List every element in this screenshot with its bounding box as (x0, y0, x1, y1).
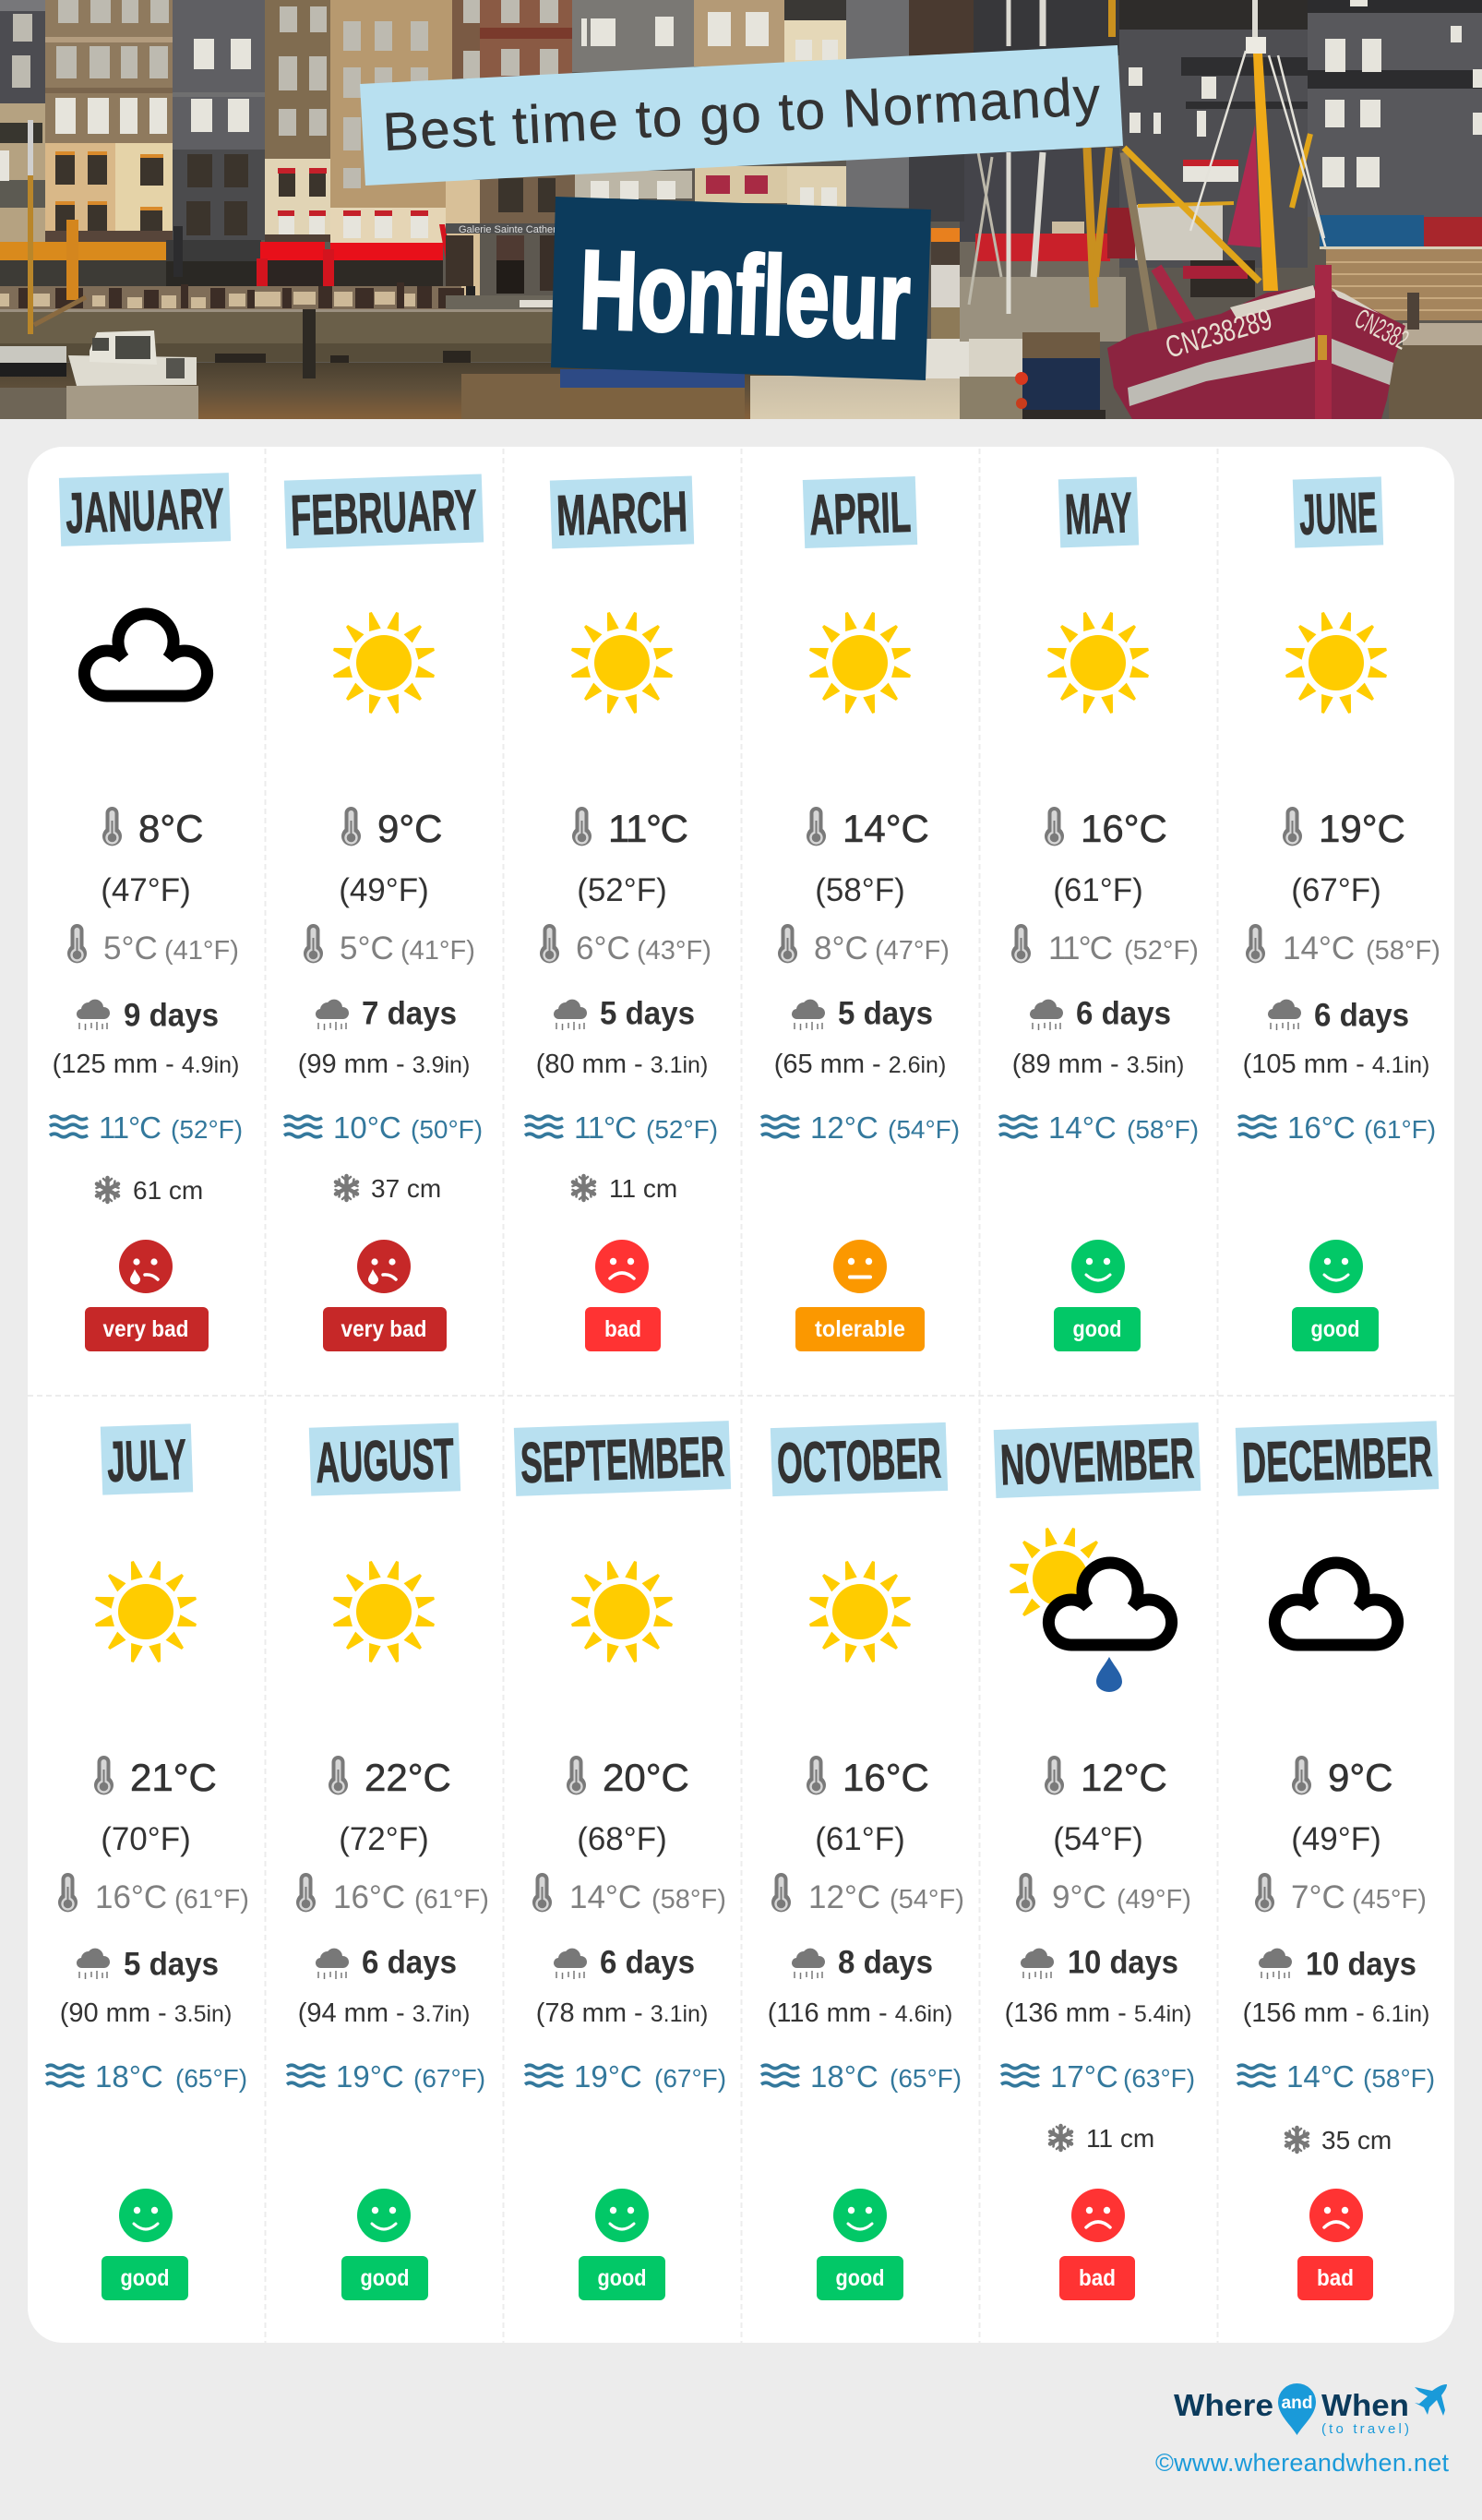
average temperature: 9°C (377, 807, 443, 850)
precipitation: (156 mm - 6.1in) (1243, 1998, 1429, 2028)
banner: subtitle: Best time to go to Normandy (381, 66, 1102, 162)
rainy days: 5 days (124, 1947, 219, 1983)
month label: JUNE (1298, 481, 1378, 547)
weather icon: sun (808, 611, 912, 714)
precipitation: (105 mm - 4.1in) (1243, 1050, 1429, 1079)
weather icon: sun (808, 1560, 912, 1663)
low temperature: (43°F) (637, 936, 711, 966)
rating: bad: bad (604, 1316, 641, 1342)
low temperature: 9°C (1052, 1879, 1106, 1915)
precipitation: (136 mm - 5.4in) (1005, 1998, 1191, 2028)
average temperature: 16°C (1081, 807, 1167, 850)
rating: very bad (85, 1240, 209, 1351)
logo: Where and When: Where (1174, 2388, 1273, 2422)
rainy days: 10 days (1306, 1947, 1416, 1983)
precipitation: (116 mm - 4.6in) (768, 1998, 952, 2028)
average temperature: 12°C (1081, 1756, 1167, 1799)
precipitation: (78 mm - 3.1in) (536, 1998, 708, 2028)
low temperature (778, 924, 950, 966)
snowfall (1050, 2124, 1154, 2153)
weather icon: sun (570, 611, 674, 714)
rating: tolerable (795, 1240, 925, 1351)
precipitation: (65 mm - 2.6in) (774, 1050, 946, 1079)
low temperature: (45°F) (1352, 1885, 1427, 1914)
weather icon: sun (570, 1560, 674, 1663)
sea temperature: (50°F) (411, 1115, 483, 1144)
average temperature: 9°C (1328, 1756, 1393, 1799)
month label: SEPTEMBER (520, 1425, 725, 1495)
rainy days: 6 days (1314, 998, 1409, 1034)
snowfall (1286, 2126, 1392, 2154)
month label (1058, 477, 1139, 547)
sea temperature (287, 2059, 485, 2094)
average temperature (572, 807, 688, 850)
low temperature (540, 924, 711, 966)
sea temperature: (63°F) (1123, 2064, 1195, 2093)
rainy days: 5 days (838, 995, 933, 1032)
low temperature: (61°F) (414, 1885, 489, 1914)
sea temperature: 18°C (810, 2059, 878, 2094)
hero photo: Honfleur harbour (0, 0, 1482, 419)
rating: good: good (360, 2265, 410, 2291)
weather icon: sun behind cloud with rain drop (1009, 1527, 1172, 1692)
rainy days (792, 1944, 933, 1981)
average temperature: 21°C (130, 1756, 217, 1799)
low temperature: (52°F) (1124, 936, 1199, 966)
sea temperature (761, 2059, 962, 2094)
low temperature (1011, 924, 1199, 966)
sea temperature (525, 1110, 718, 1145)
month label: FEBRUARY (290, 478, 478, 548)
rating: good: good (1072, 1316, 1122, 1342)
month label: OCTOBER (776, 1427, 942, 1495)
cell: March (525, 475, 718, 1351)
month label (994, 1422, 1201, 1498)
snowfall: 11 cm (1086, 2124, 1154, 2153)
sea temperature: 17°C (1050, 2059, 1118, 2094)
sea temperature: (67°F) (654, 2064, 726, 2093)
sea temperature: (58°F) (1127, 1115, 1199, 1144)
average temperature: 11°C (608, 807, 688, 850)
low temperature: 5°C (340, 930, 394, 966)
cell: November (994, 1422, 1201, 2300)
low temperature (1255, 1873, 1427, 1915)
precipitation: (94 mm - 3.7in) (298, 1998, 470, 2028)
rating: good: good (598, 2265, 646, 2291)
cell: May (999, 477, 1199, 1351)
sea temperature (284, 1110, 483, 1145)
sea temperature: 14°C (1048, 1110, 1117, 1145)
rating: good: good (836, 2265, 884, 2291)
rainy days: 7 days (362, 995, 457, 1032)
rainy days: 6 days (600, 1944, 695, 1981)
rating: very bad: very bad (341, 1316, 426, 1342)
rating: good (102, 2189, 188, 2300)
low temperature: (58°F) (1366, 936, 1440, 966)
month label: MAY (1064, 481, 1133, 547)
banner: city title: Honfleur (578, 226, 912, 363)
rating: very bad (323, 1240, 447, 1351)
low temperature: (41°F) (164, 936, 239, 966)
fahrenheit temperature: (61°F) (1053, 872, 1143, 908)
low temperature: 16°C (95, 1879, 167, 1915)
rainy days (1259, 1947, 1416, 1983)
low temperature: (54°F) (890, 1885, 964, 1914)
sea temperature (1238, 1110, 1436, 1145)
month label (284, 474, 484, 549)
sea temperature: (52°F) (171, 1115, 243, 1144)
month label: NOVEMBER (999, 1427, 1195, 1497)
month label: JANUARY (65, 477, 225, 546)
rating: good (1292, 1240, 1379, 1351)
low temperature: (61°F) (174, 1885, 249, 1914)
snowfall: 35 cm (1321, 2126, 1392, 2154)
fahrenheit temperature: (49°F) (1291, 1821, 1381, 1857)
low temperature: 11°C (1048, 930, 1113, 966)
sea temperature (1001, 2059, 1195, 2094)
cell: August (287, 1422, 489, 2300)
low temperature (771, 1873, 964, 1915)
rainy days: 8 days (838, 1944, 933, 1981)
rating: bad (1059, 2189, 1135, 2300)
sea temperature: 16°C (1287, 1110, 1356, 1145)
low temperature: 12°C (808, 1879, 880, 1915)
cell: October (761, 1422, 964, 2300)
fahrenheit temperature: (70°F) (101, 1821, 191, 1857)
rainy days (1021, 1944, 1178, 1981)
average temperature: 8°C (138, 807, 203, 850)
hero photo: Honfleur harbour: CN238289 (1162, 302, 1275, 365)
cell: September (514, 1421, 731, 2300)
weather icon: sun (332, 1560, 436, 1663)
low temperature (1016, 1873, 1191, 1915)
rainy days (316, 995, 457, 1032)
rainy days (1268, 998, 1409, 1034)
low temperature: 14°C (569, 1879, 641, 1915)
sea temperature (761, 1110, 960, 1145)
month label (59, 473, 231, 546)
weather icon: cloud (84, 614, 208, 696)
rainy days (554, 1944, 695, 1981)
low temperature: 7°C (1291, 1879, 1345, 1915)
month label (550, 475, 694, 549)
logo: Where and When: When (1321, 2388, 1409, 2422)
rating: good (341, 2189, 428, 2300)
low temperature: (47°F) (875, 936, 950, 966)
low temperature: 5°C (103, 930, 158, 966)
logo: Where and When (1174, 2383, 1447, 2437)
month label (514, 1421, 731, 1496)
precipitation: (80 mm - 3.1in) (536, 1050, 708, 1079)
snowfall: 37 cm (371, 1174, 441, 1203)
snowfall: 11 cm (609, 1174, 677, 1203)
precipitation: (99 mm - 3.9in) (298, 1050, 470, 1079)
month label: AUGUST (315, 1427, 455, 1495)
rainy days: 9 days (124, 998, 219, 1034)
sea temperature: 19°C (574, 2059, 642, 2094)
rainy days (316, 1944, 457, 1981)
snowfall (336, 1174, 441, 1203)
sea temperature: 14°C (1286, 2059, 1355, 2094)
cell: April (761, 476, 960, 1351)
sea temperature (1237, 2059, 1435, 2094)
banner: city title (551, 197, 931, 380)
low temperature: (41°F) (400, 936, 475, 966)
month label (101, 1423, 193, 1495)
rainy days: 5 days (600, 995, 695, 1032)
sea temperature (525, 2059, 726, 2094)
low temperature: 8°C (814, 930, 868, 966)
sea temperature: (65°F) (175, 2064, 247, 2093)
average temperature: 19°C (1319, 807, 1405, 850)
cell: January (50, 473, 243, 1351)
hero photo: Honfleur harbour: Galerie Sainte Catherine (459, 224, 569, 235)
sea temperature (46, 2059, 247, 2094)
average temperature: 16°C (843, 1756, 929, 1799)
fahrenheit temperature: (67°F) (1291, 872, 1381, 908)
average temperature: 22°C (365, 1756, 451, 1799)
month label: MARCH (556, 480, 688, 548)
rating: bad (585, 1240, 661, 1351)
sea temperature (50, 1110, 243, 1145)
logo: Where and When: (to travel) (1321, 2421, 1409, 2437)
snowfall: 61 cm (133, 1176, 203, 1205)
sea temperature: (52°F) (646, 1115, 718, 1144)
rainy days (1030, 995, 1171, 1032)
low temperature: 16°C (333, 1879, 405, 1915)
rainy days (77, 998, 219, 1034)
sea temperature (999, 1110, 1199, 1145)
average temperature (1292, 1756, 1393, 1799)
rainy days: 6 days (1076, 995, 1171, 1032)
sea temperature: (58°F) (1363, 2064, 1435, 2093)
snowfall (572, 1174, 677, 1203)
sea temperature: (65°F) (890, 2064, 962, 2093)
rating: good: good (1310, 1316, 1360, 1342)
logo: Where and When: and (1281, 2394, 1312, 2413)
average temperature: 14°C (843, 807, 929, 850)
sea temperature: (67°F) (413, 2064, 485, 2093)
average temperature (341, 807, 443, 850)
low temperature: (49°F) (1117, 1885, 1191, 1914)
fahrenheit temperature: (47°F) (101, 872, 191, 908)
month label: APRIL (808, 481, 912, 547)
sea temperature: 10°C (333, 1110, 401, 1145)
average temperature (102, 807, 203, 850)
fahrenheit temperature: (49°F) (339, 872, 429, 908)
month label (803, 476, 917, 548)
weather icon: sun (94, 1560, 197, 1663)
rainy days: 10 days (1068, 1944, 1178, 1981)
precipitation: (90 mm - 3.5in) (60, 1998, 232, 2028)
low temperature (58, 1873, 249, 1915)
rainy days: 6 days (362, 1944, 457, 1981)
fahrenheit temperature: (61°F) (815, 1821, 905, 1857)
rating: tolerable: tolerable (815, 1316, 905, 1342)
low temperature (532, 1873, 726, 1915)
hero photo: Honfleur harbour: CN2382 (1350, 304, 1413, 355)
weather icon: sun (1285, 611, 1388, 714)
website credit: ©www.whereandwhen.net (1155, 2449, 1449, 2477)
cell: February (284, 474, 484, 1351)
rainy days (792, 995, 933, 1032)
sea temperature: 12°C (810, 1110, 878, 1145)
sea temperature: 19°C (336, 2059, 404, 2094)
rating: good (817, 2189, 903, 2300)
fahrenheit temperature: (58°F) (815, 872, 905, 908)
rating: bad: bad (1317, 2265, 1354, 2291)
low temperature (1246, 924, 1440, 966)
month label (771, 1422, 948, 1496)
cell: June (1238, 476, 1440, 1351)
rainy days (554, 995, 695, 1032)
banner: subtitle (360, 45, 1123, 186)
sea temperature: (61°F) (1364, 1115, 1436, 1144)
weather icon: sun (1046, 611, 1150, 714)
fahrenheit temperature: (68°F) (577, 1821, 667, 1857)
fahrenheit temperature: (72°F) (339, 1821, 429, 1857)
fahrenheit temperature: (52°F) (577, 872, 667, 908)
sea temperature: 18°C (95, 2059, 163, 2094)
low temperature (304, 924, 475, 966)
rating: very bad: very bad (103, 1316, 188, 1342)
weather icon: sun (332, 611, 436, 714)
fahrenheit temperature: (54°F) (1053, 1821, 1143, 1857)
low temperature (67, 924, 239, 966)
rating: good (579, 2189, 665, 2300)
rating: bad: bad (1079, 2265, 1116, 2291)
rating: bad (1297, 2189, 1373, 2300)
precipitation: (125 mm - 4.9in) (53, 1050, 239, 1079)
cell: July (46, 1423, 249, 2300)
panel: climate calendar (28, 447, 1454, 2343)
low temperature: 14°C (1283, 930, 1355, 966)
snowfall (96, 1176, 203, 1205)
rainy days (77, 1947, 219, 1983)
precipitation: (89 mm - 3.5in) (1012, 1050, 1184, 1079)
month label (309, 1422, 460, 1496)
rating: good: good (120, 2265, 170, 2291)
cell: December (1236, 1421, 1439, 2300)
average temperature: 20°C (603, 1756, 689, 1799)
weather icon: cloud (1274, 1563, 1398, 1645)
month label (1293, 476, 1383, 548)
low temperature: 6°C (576, 930, 630, 966)
sea temperature: (54°F) (888, 1115, 960, 1144)
rating: good (1054, 1240, 1141, 1351)
sea temperature: 11°C (574, 1110, 637, 1145)
low temperature (296, 1873, 489, 1915)
low temperature: (58°F) (651, 1885, 726, 1914)
month label: JULY (106, 1428, 187, 1494)
sea temperature: 11°C (99, 1110, 161, 1145)
